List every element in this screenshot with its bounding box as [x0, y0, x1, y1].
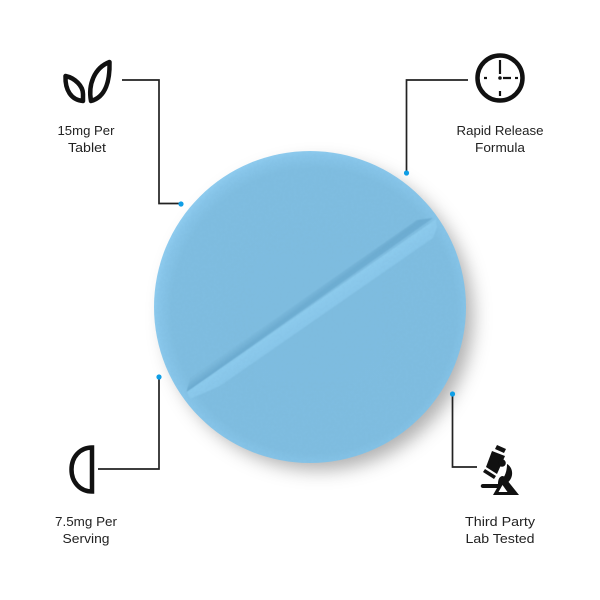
connector dot	[156, 374, 162, 380]
callout: rapid release formula: Formula	[475, 140, 526, 155]
label: Rapid Release	[456, 123, 544, 138]
callout: 15mg per tablet: Tablet	[68, 140, 106, 155]
icon: leaves	[65, 62, 110, 101]
label: Third Party	[465, 514, 536, 529]
icon: half tablet	[72, 448, 92, 492]
label: 7.5mg Per	[55, 514, 118, 529]
tablet shadow	[165, 162, 473, 470]
connector line	[406, 80, 468, 172]
connector dot	[178, 201, 184, 207]
callout: third party lab tested: Lab Tested	[466, 531, 534, 546]
score groove	[187, 218, 433, 392]
icon: microscope	[481, 445, 519, 495]
surface grain	[154, 151, 466, 463]
connector line	[452, 394, 477, 467]
connector dot	[450, 391, 455, 397]
connector line	[98, 378, 159, 469]
label: 15mg Per	[58, 123, 115, 138]
score ridge highlight	[187, 219, 437, 399]
connector line	[122, 80, 180, 204]
connector dot	[404, 170, 409, 176]
callout: third party lab tested	[450, 391, 536, 546]
callout: 7.5mg per serving: Serving	[62, 531, 110, 546]
callout: rapid release formula	[404, 56, 544, 176]
callout: 7.5mg per serving	[55, 374, 162, 546]
icon: clock	[478, 56, 522, 100]
callout: 15mg per tablet	[58, 62, 184, 207]
blue scored tablet	[154, 151, 466, 463]
